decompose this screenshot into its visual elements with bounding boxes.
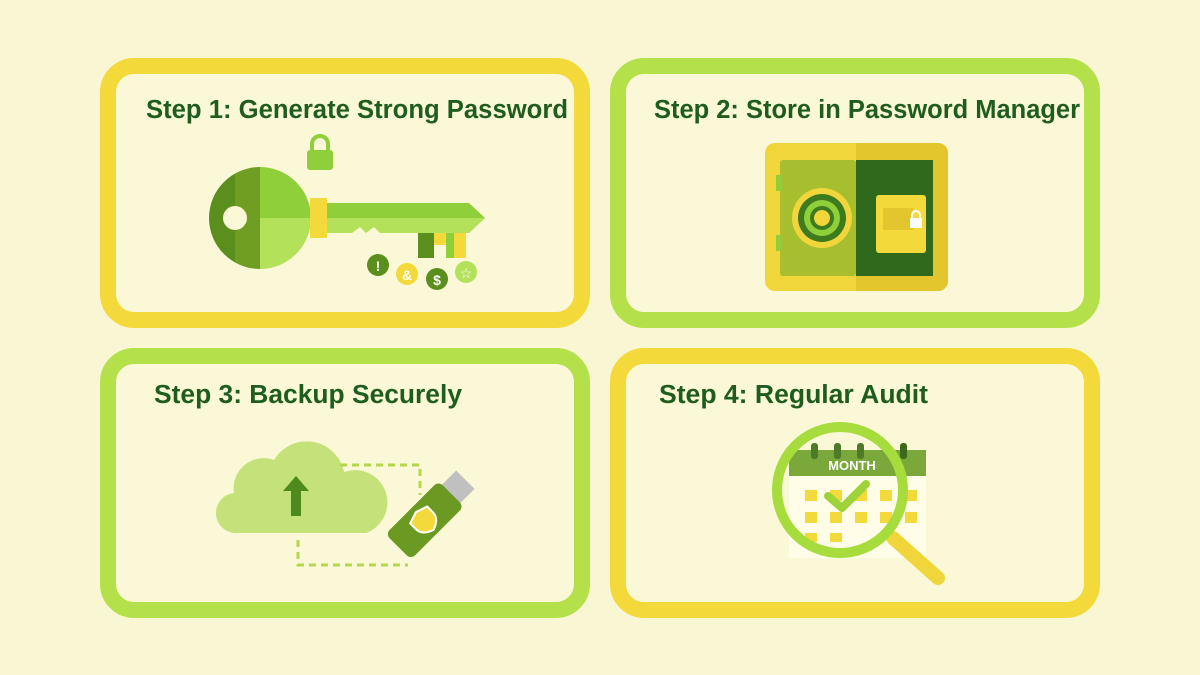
icon: key: $ — [433, 272, 441, 288]
icon: key: & — [402, 267, 412, 283]
panel: step 2 — [618, 66, 1092, 320]
heading: step 1: Step 1: Generate Strong Password — [146, 96, 568, 124]
icon: calendar with magnifier — [777, 427, 938, 578]
heading: step 2: Step 2: Store in Password Manager — [654, 96, 1080, 124]
heading: step 4: Step 4: Regular Audit — [659, 381, 929, 409]
icon: safe — [765, 143, 948, 291]
icon: calendar with magnifier: MONTH — [828, 458, 876, 473]
icon: key — [200, 136, 485, 290]
icon: key: ☆ — [460, 265, 472, 281]
icon: cloud and usb — [216, 441, 478, 565]
heading: step 3: Step 3: Backup Securely — [154, 381, 463, 409]
panel: step 4 — [618, 356, 1092, 610]
panel: step 1 — [108, 66, 582, 320]
icon: key: ! — [376, 258, 380, 274]
panel: step 3 — [108, 356, 582, 610]
